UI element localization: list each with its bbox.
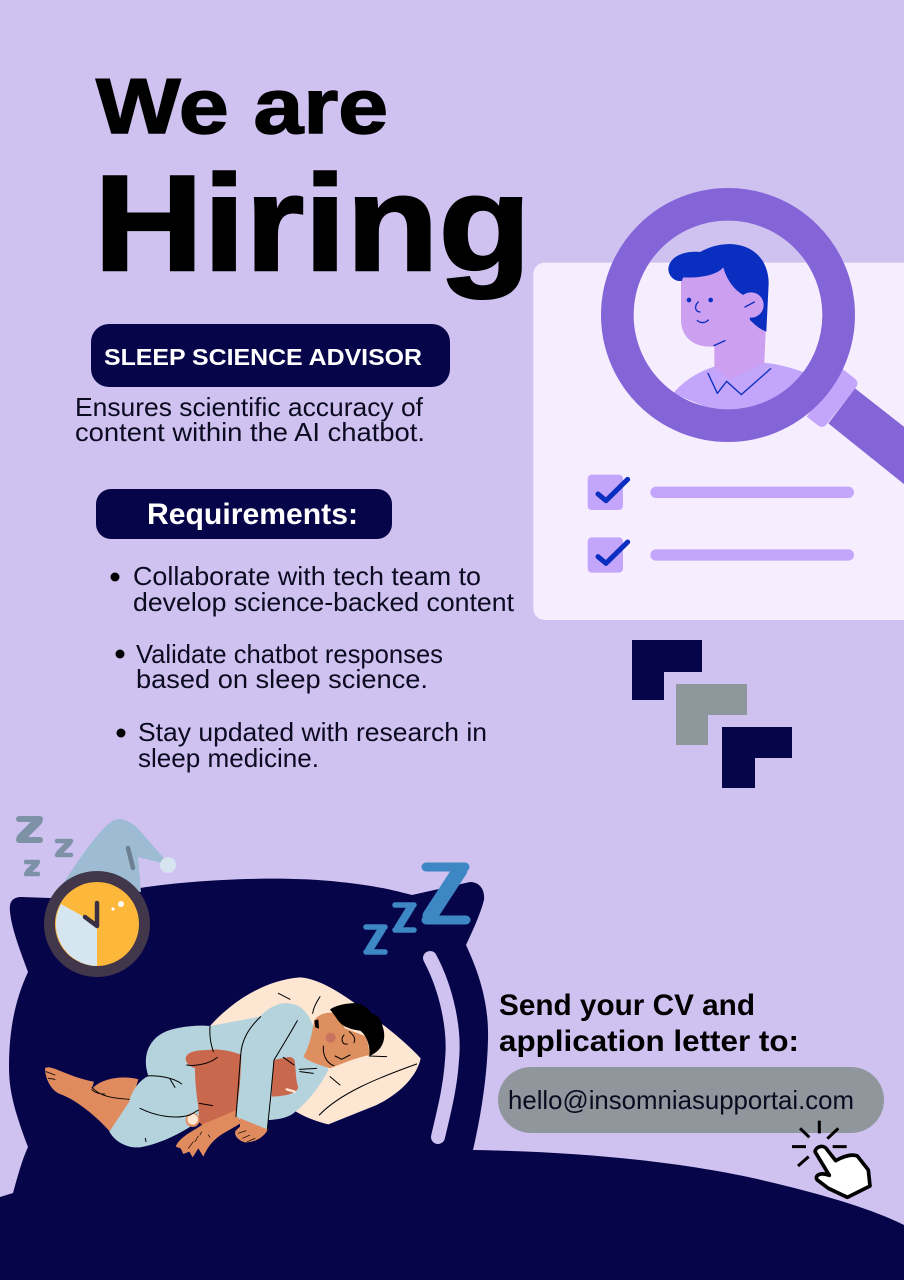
watch — [186, 1113, 200, 1127]
teddy head — [272, 1057, 298, 1097]
magnifier handle — [828, 388, 904, 492]
hair — [314, 1003, 384, 1056]
clock hands — [85, 903, 97, 926]
foot line details — [46, 1072, 129, 1099]
checklist card with magnifier — [533, 204, 904, 620]
job title badge — [91, 324, 450, 387]
role description: content within the AI chatbot. — [75, 417, 425, 447]
navy pillow and ground — [0, 879, 904, 1280]
legs — [45, 1067, 138, 1132]
magnifier collar — [807, 368, 857, 427]
requirement 1: develop science-backed content — [133, 587, 515, 617]
role description: Ensures scientific accuracy of — [75, 392, 424, 422]
far hand — [235, 1117, 268, 1142]
requirement 3: Stay updated with research in — [138, 717, 487, 747]
requirements list — [110, 561, 515, 773]
person portrait — [668, 244, 807, 412]
stepped block shapes — [632, 640, 792, 788]
clock ring — [44, 871, 150, 977]
call to action heading: Send your CV and — [499, 989, 755, 1022]
clock face — [55, 882, 139, 966]
title line: Hiring: Hiring — [94, 147, 531, 299]
requirement 2: Validate chatbot responses — [136, 639, 443, 669]
requirements heading — [96, 489, 392, 539]
call to action heading: application letter to: — [499, 1025, 799, 1058]
checklist row 2 — [588, 537, 854, 573]
near hand — [176, 1110, 241, 1157]
requirement 3: sleep medicine. — [138, 743, 319, 773]
head — [299, 1003, 384, 1073]
sleeping person illustration — [45, 977, 421, 1157]
zzz left grey — [19, 819, 71, 874]
requirement 2 — [116, 639, 443, 694]
call to action heading — [499, 989, 799, 1058]
teddy body — [186, 1050, 242, 1126]
requirement 1: Collaborate with tech team to — [133, 561, 481, 591]
card — [533, 263, 904, 620]
email pill: hello@insomniasupportai.com — [508, 1085, 854, 1115]
title line: We are: We are — [96, 62, 388, 150]
nightcap — [64, 819, 170, 892]
pajamas — [109, 1003, 328, 1147]
clock with nightcap — [44, 819, 176, 977]
nightcap bobble — [160, 857, 176, 873]
role description — [75, 392, 425, 447]
requirement 3 — [116, 717, 487, 773]
cream pillow — [210, 977, 421, 1124]
requirements heading: Requirements: — [147, 498, 358, 531]
pillow highlight stroke — [430, 958, 453, 1137]
clothing line details — [140, 1017, 297, 1148]
teddy bear and arms — [176, 1003, 315, 1157]
email pill — [498, 1067, 884, 1133]
zzz right blue — [366, 867, 466, 952]
requirement 1 — [110, 561, 515, 617]
title — [94, 62, 531, 299]
sleeve — [236, 1003, 315, 1129]
checklist row 1 — [588, 475, 854, 510]
magnifier ring — [617, 204, 839, 426]
job title badge: SLEEP SCIENCE ADVISOR — [104, 344, 422, 370]
icon: click hand — [792, 1121, 870, 1197]
requirement 2: based on sleep science. — [136, 664, 428, 694]
